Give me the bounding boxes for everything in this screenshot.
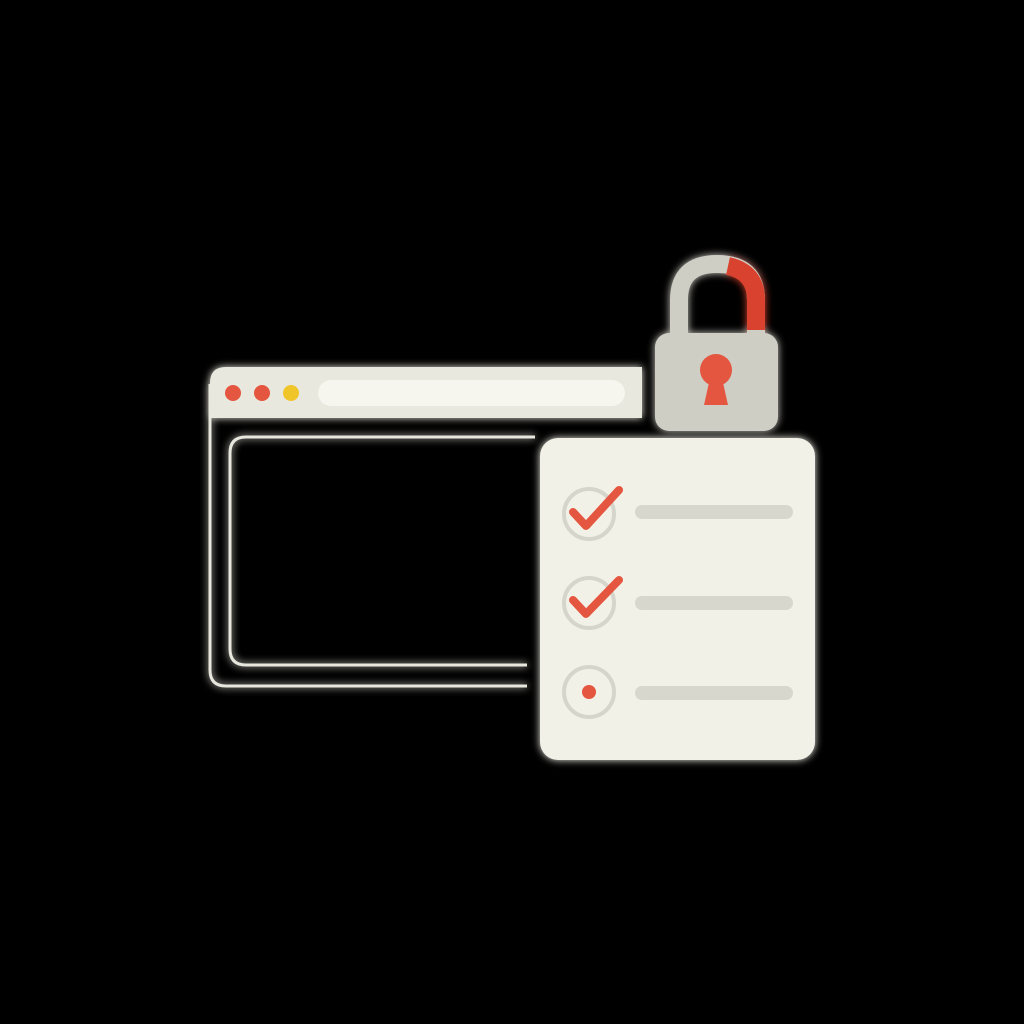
address bar (318, 380, 625, 406)
browser top bar (210, 367, 642, 418)
item 2 checked (564, 578, 793, 628)
browser window (210, 367, 642, 686)
item 1 checked (564, 489, 793, 539)
item 3 pending (564, 667, 793, 717)
keyhole (700, 354, 732, 405)
browser frame (210, 384, 527, 686)
inner content panel (230, 437, 535, 665)
checklist card (540, 438, 815, 760)
icon: padlock (655, 264, 778, 431)
window dots (225, 385, 299, 401)
shackle (679, 264, 756, 335)
lock body (655, 333, 778, 431)
